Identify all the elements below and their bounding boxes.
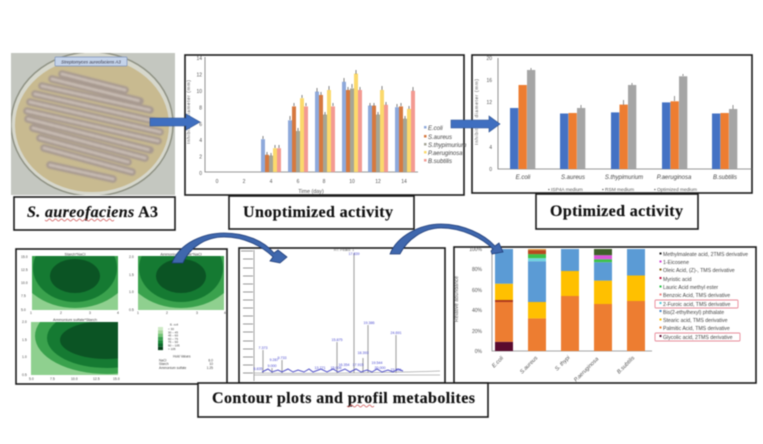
contour axis labels: 2 <box>60 311 62 315</box>
peak labels: 15.875 <box>332 338 342 342</box>
peak labels: 17.915 <box>352 363 364 367</box>
hold values text: Ammonium sulfate <box>159 366 186 370</box>
contour axis labels: 15.0 <box>113 377 120 381</box>
legend: Glycolic acid, 2TMS derivative <box>663 335 733 341</box>
contour axis labels: 0.5 <box>129 308 134 312</box>
y axis labels <box>486 56 492 173</box>
x axis labels: B.subtilis <box>713 175 737 181</box>
contour legend: 75 – 90 <box>168 340 178 344</box>
chromatogram y axis ticks <box>241 250 254 381</box>
hold values text: 1.25 <box>207 366 213 370</box>
panel: optimized activity bar chart <box>472 55 752 193</box>
x axis labels <box>491 354 636 383</box>
peak labels: 7.373 <box>258 346 268 350</box>
legend <box>660 252 748 341</box>
y axis labels: 2 <box>199 155 202 161</box>
x axis labels: 6 <box>297 179 300 185</box>
contour axis labels: 10.0 <box>71 377 78 381</box>
bar: B.subtilis <box>627 249 645 351</box>
peak labels: 18.393 <box>358 351 368 355</box>
bars <box>261 70 415 172</box>
chromatogram peaks <box>263 253 396 373</box>
legend: ▪ Optimized medium <box>654 187 697 193</box>
peak labels: 6.835 <box>254 367 262 371</box>
bars <box>510 68 737 169</box>
contour axis labels: 4 <box>224 311 226 315</box>
x axis title: Time (day) <box>298 189 324 195</box>
legend: ▪ ISP4A medium <box>548 187 583 193</box>
peak labels: 9.287 <box>270 358 278 362</box>
contour plot: ammonium sulfate by NaCl <box>137 255 225 311</box>
caption: Optimized activity <box>536 194 698 229</box>
contour axis labels: 10.0 <box>21 281 28 285</box>
legend <box>548 187 697 193</box>
peak labels: 19.544 <box>372 361 382 365</box>
hold values text <box>159 354 213 370</box>
small peak cluster <box>262 369 403 372</box>
x axis labels: E.coli <box>516 175 531 181</box>
contour titles <box>53 252 202 322</box>
legend: Stearic acid, TMS derivative <box>663 318 728 324</box>
legend: 1-Eicosene <box>663 260 689 266</box>
contour plot: starch by NaCl <box>31 255 119 311</box>
contour titles: Ammonium sulfate*Starch <box>53 318 97 322</box>
peak labels: 19.386 <box>364 321 374 325</box>
legend: E.coli <box>428 126 443 132</box>
y axis title: Inhibition diameter (mm) <box>186 80 192 144</box>
arrow: plate to unoptimized chart <box>150 114 200 130</box>
y axis labels: 0% <box>475 349 483 355</box>
x axis labels: E.coli <box>491 355 506 369</box>
x axis labels: 12 <box>375 179 381 185</box>
caption: Unoptimized activity <box>229 196 414 229</box>
hold values text: Hold Values <box>173 354 191 358</box>
legend: ▪ RSM medium <box>602 187 634 193</box>
arrow: contour plots to chromatogram <box>172 233 287 263</box>
legend: 2-Furoic acid, TMS derivative <box>663 302 730 308</box>
x axis labels: 4 <box>270 179 273 185</box>
contour axis labels: 5.0 <box>29 377 34 381</box>
peak labels <box>254 252 402 372</box>
peak labels: 13.771 <box>314 366 326 370</box>
bar: S.thypi <box>561 249 579 351</box>
y axis labels: 16 <box>486 78 492 84</box>
y axis labels: 60% <box>472 288 483 294</box>
x axis labels: S.aureus <box>519 355 539 375</box>
contour axis labels: 3 <box>196 311 198 315</box>
contour axis labels: 4 <box>117 311 119 315</box>
peak labels: 24.691 <box>390 331 402 335</box>
caption: S. aureofaciens A3 <box>14 197 175 230</box>
contour axis labels <box>21 255 226 381</box>
x axis labels: 2 <box>243 179 246 185</box>
caption: S. aureofaciens A3: S. aureofaciens A3 <box>27 204 158 221</box>
contour legend: 30 – 45 <box>168 330 178 334</box>
y axis labels: 40% <box>472 308 483 314</box>
x axis labels <box>216 179 407 185</box>
contour legend <box>158 322 180 351</box>
panel: petri dish photo <box>11 52 175 196</box>
contour axis labels: 2.0 <box>22 320 27 324</box>
x axis labels: 0 <box>216 179 219 185</box>
legend <box>424 126 466 165</box>
caption: contour plots and profil metabolites <box>198 383 488 417</box>
legend: Methylmaleate acid, 2TMS derivative <box>663 252 748 258</box>
caption: Unoptimized activity: Unoptimized activity <box>243 204 393 221</box>
peak labels: 17.839 <box>348 252 360 256</box>
legend: Myristic acid <box>663 277 692 283</box>
contour legend: < 30 <box>168 327 174 331</box>
legend: S.thypimurium <box>428 143 466 149</box>
y axis labels <box>469 247 483 355</box>
y axis labels: 12 <box>196 73 202 79</box>
x axis labels: P.aeruginosa <box>573 356 600 383</box>
x axis labels: 10 <box>349 179 355 185</box>
y axis labels: 4 <box>489 145 492 151</box>
y axis labels: 80% <box>472 267 483 273</box>
contour plot: ammonium sulfate by starch <box>30 321 119 376</box>
bar: P.aeruginosa <box>594 249 612 351</box>
peak labels: 16.354 <box>338 363 350 367</box>
arrow: unoptimized to optimized chart <box>451 116 500 132</box>
legend: Bis(2-ethylhexyl) phthalate <box>663 310 724 316</box>
contour titles: Starch*NaCl <box>65 252 86 256</box>
x axis labels: B.subtilis <box>616 355 636 375</box>
bar: E.coli <box>495 249 513 351</box>
plate label: Streptomyces aureofaciens A3 <box>61 59 121 64</box>
x axis labels <box>516 175 737 181</box>
contour legend: E. coli <box>170 322 179 326</box>
panel: stacked bar chart of metabolites <box>454 247 756 383</box>
hold values text: 10 <box>209 362 213 366</box>
y axis title: Relative abundance <box>454 276 460 322</box>
contour axis labels: 2 <box>166 311 168 315</box>
y axis labels: 0 <box>199 171 202 177</box>
stacked bars <box>495 249 645 351</box>
legend: Lauric Acid methyl ester <box>663 285 718 291</box>
peak labels: 15.006 <box>330 366 342 370</box>
y axis labels <box>196 56 202 177</box>
peak labels: 9.733 <box>278 356 286 360</box>
legend: S.aureus <box>428 135 452 141</box>
y axis labels: 0 <box>489 167 492 173</box>
contour titles: Ammonium sulfate*NaCl <box>160 252 202 256</box>
caption: contour plots and profil metabolites: Contour plots and profil metabolites <box>212 390 475 407</box>
contour legend: 45 – 60 <box>168 334 178 338</box>
contour axis labels: 3 <box>89 311 91 315</box>
y axis labels: 10 <box>196 89 202 95</box>
contour legend: 60 – 75 <box>168 337 178 341</box>
peak labels: 9.000 <box>268 364 276 368</box>
hold values text: Starch <box>159 362 169 366</box>
peak labels: 20.000 <box>374 366 386 370</box>
contour legend: > 105 <box>168 347 176 351</box>
panel: contour plots <box>14 247 229 386</box>
bar: S.aureus <box>528 249 546 351</box>
legend highlight boxes <box>655 300 740 341</box>
contour axis labels: 12.5 <box>21 268 28 272</box>
contour axis labels: 15.0 <box>21 255 28 259</box>
caption: Optimized activity: Optimized activity <box>550 203 683 220</box>
arrow: chromatogram to metabolite chart <box>390 224 503 254</box>
contour axis labels: 1.0 <box>22 355 27 359</box>
contour axis labels: 1.5 <box>22 338 27 342</box>
contour axis labels: 1 <box>30 311 32 315</box>
legend: B.subtilis <box>428 159 452 165</box>
hold values text: NaCl <box>159 358 167 362</box>
y axis labels: 14 <box>196 56 202 62</box>
contour axis labels: 1.0 <box>129 290 134 294</box>
contour axis labels: 0.5 <box>22 373 27 377</box>
x axis labels: S.aureus <box>561 175 585 181</box>
panel: unoptimized activity bar chart <box>185 55 466 195</box>
contour legend: 90 – 105 <box>168 344 180 348</box>
contour axis labels: 7.5 <box>21 294 26 298</box>
y axis labels: 6 <box>199 122 202 128</box>
hold values text: 6.0 <box>208 358 213 362</box>
x axis labels: S.thypimurium <box>605 175 643 181</box>
y axis labels: 12 <box>486 100 492 106</box>
x axis labels: 8 <box>323 179 326 185</box>
legend: Oleic Acid, (Z)-, TMS derivative <box>663 268 735 274</box>
y axis labels: 100% <box>469 247 483 253</box>
y axis labels: 20 <box>486 56 492 62</box>
plate label <box>55 57 127 66</box>
chromatogram header: RT: Peaks: 1 <box>334 248 354 252</box>
y axis title: Inhibition diameter (mm) <box>474 79 480 145</box>
x axis labels: P.aeruginosa <box>657 175 692 181</box>
contour axis labels: 5.0 <box>21 308 26 312</box>
x axis labels: 14 <box>401 179 407 185</box>
contour axis labels: 7.5 <box>50 377 55 381</box>
contour axis labels: 1 <box>137 311 139 315</box>
legend: Palmitic Acid, TMS derivative <box>663 326 730 332</box>
x axis labels: S. thypi <box>554 354 572 372</box>
contour axis labels: 1.5 <box>129 273 134 277</box>
contour axis labels: 2.0 <box>129 255 134 259</box>
bacterial streaks <box>27 74 160 179</box>
legend: Benzoic Acid, TMS derivative <box>663 293 730 299</box>
panel: chromatogram <box>239 248 445 383</box>
y axis labels: 4 <box>199 138 202 144</box>
y axis labels: 20% <box>472 329 483 335</box>
chromatogram baseline <box>254 371 440 375</box>
peak labels: 23.551 <box>390 368 402 372</box>
y axis labels: 8 <box>199 105 202 111</box>
contour axis labels: 12.5 <box>93 377 100 381</box>
legend: P.aeruginosa <box>428 151 463 157</box>
